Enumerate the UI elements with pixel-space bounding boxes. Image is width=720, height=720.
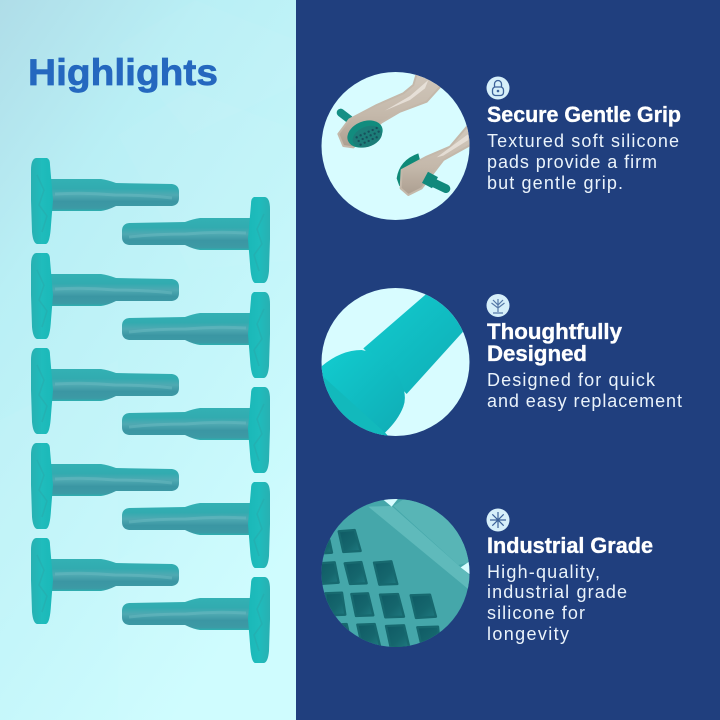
text block: industrial description: silicone for	[487, 603, 585, 623]
icon: asterisk snowflake	[486, 508, 510, 532]
icon: design tree	[486, 294, 510, 317]
text block: industrial description: industrial grade	[487, 582, 627, 602]
title: Highlights	[28, 52, 218, 93]
heading: Industrial Grade: Industrial Grade	[487, 533, 653, 558]
text block: grip description: but gentle grip.	[487, 173, 623, 193]
heading: Thoughtfully Designed: Designed	[487, 341, 587, 366]
text block: industrial description: High-quality,	[487, 562, 600, 582]
heading: Thoughtfully Designed	[486, 294, 623, 366]
photo circle: textured pad close-up	[319, 495, 473, 649]
heading: Secure Gentle Grip: Secure Gentle Grip	[487, 102, 681, 127]
text block: grip description	[487, 131, 679, 193]
heading: Industrial Grade	[486, 508, 653, 558]
heading: Secure Gentle Grip	[486, 76, 681, 127]
text block: grip description: pads provide a firm	[487, 152, 657, 172]
text block: grip description: Textured soft silicone	[487, 131, 679, 151]
photo circle: peg close-up	[322, 288, 470, 436]
text block: industrial description: longevity	[487, 624, 569, 644]
panel: left light blue background	[0, 0, 296, 720]
text block: industrial description	[487, 562, 627, 644]
icon: padlock	[486, 76, 510, 100]
text block: design description	[487, 370, 682, 411]
image: column of silicone pegs	[31, 158, 270, 663]
text block: design description: and easy replacement	[487, 391, 682, 411]
photo circle: tweezers with silicone pads	[320, 68, 473, 222]
heading: Thoughtfully Designed: Thoughtfully	[487, 319, 623, 344]
text block: design description: Designed for quick	[487, 370, 656, 390]
